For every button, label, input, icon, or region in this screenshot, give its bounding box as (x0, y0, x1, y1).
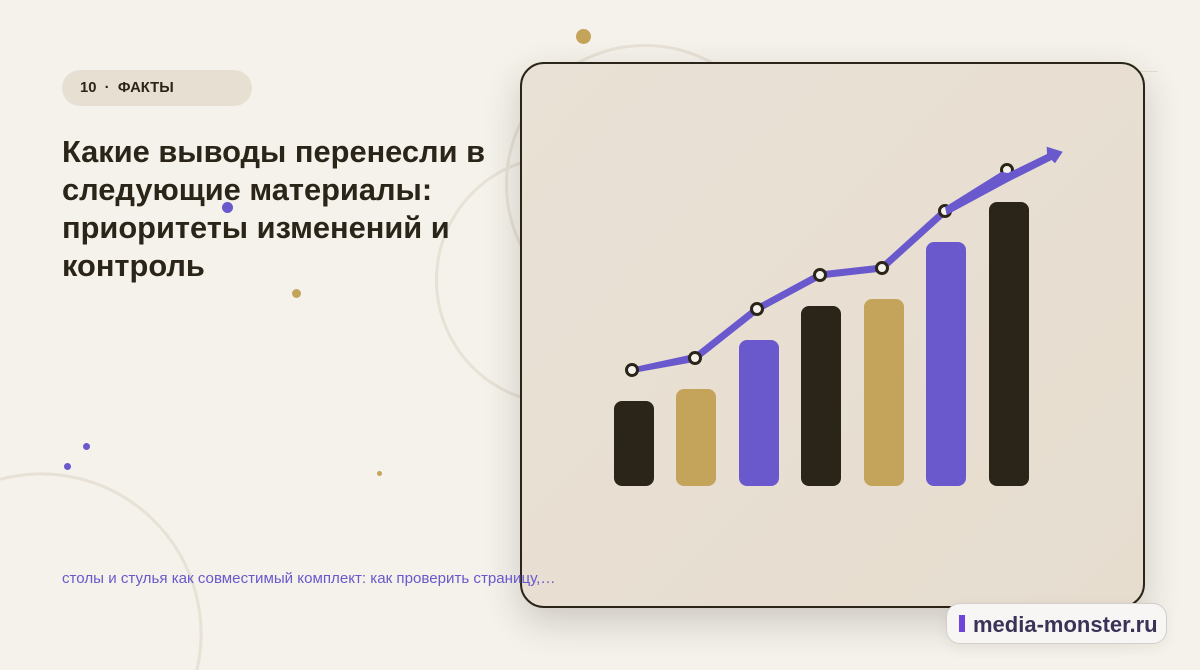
title (62, 134, 485, 283)
title: контроль (62, 248, 205, 283)
accent dot: violet lower (64, 463, 71, 470)
decorative line: right of panel (1140, 71, 1158, 72)
accent dot: violet over title (222, 202, 233, 213)
accent dot: violet upper (83, 443, 90, 450)
accent dot: small gold (377, 471, 382, 476)
watermark: media-monster.ru (973, 612, 1158, 637)
trend arrow (945, 147, 1063, 215)
trend line: middle segments (695, 211, 945, 358)
title: Какие выводы перенесли в (62, 134, 485, 169)
title: приоритеты изменений и (62, 210, 450, 245)
accent dot: large gold (576, 29, 591, 44)
watermark (946, 603, 1167, 644)
accent dot: gold under title (292, 289, 301, 298)
title: следующие материалы: (62, 172, 432, 207)
decorative ring: middle (435, 155, 685, 405)
trend line: first segment (632, 354, 697, 373)
chart panel (520, 62, 1145, 608)
data points (626, 164, 1012, 376)
bars (614, 202, 1029, 486)
decorative ring: bottom left (0, 472, 202, 670)
subtitle: столы и стулья как совместимый комплект: как проверить страницу,… (62, 570, 555, 587)
badge (62, 70, 252, 106)
badge: 10 · ФАКТЫ (80, 80, 174, 96)
decorative ring: top centre (505, 44, 785, 324)
